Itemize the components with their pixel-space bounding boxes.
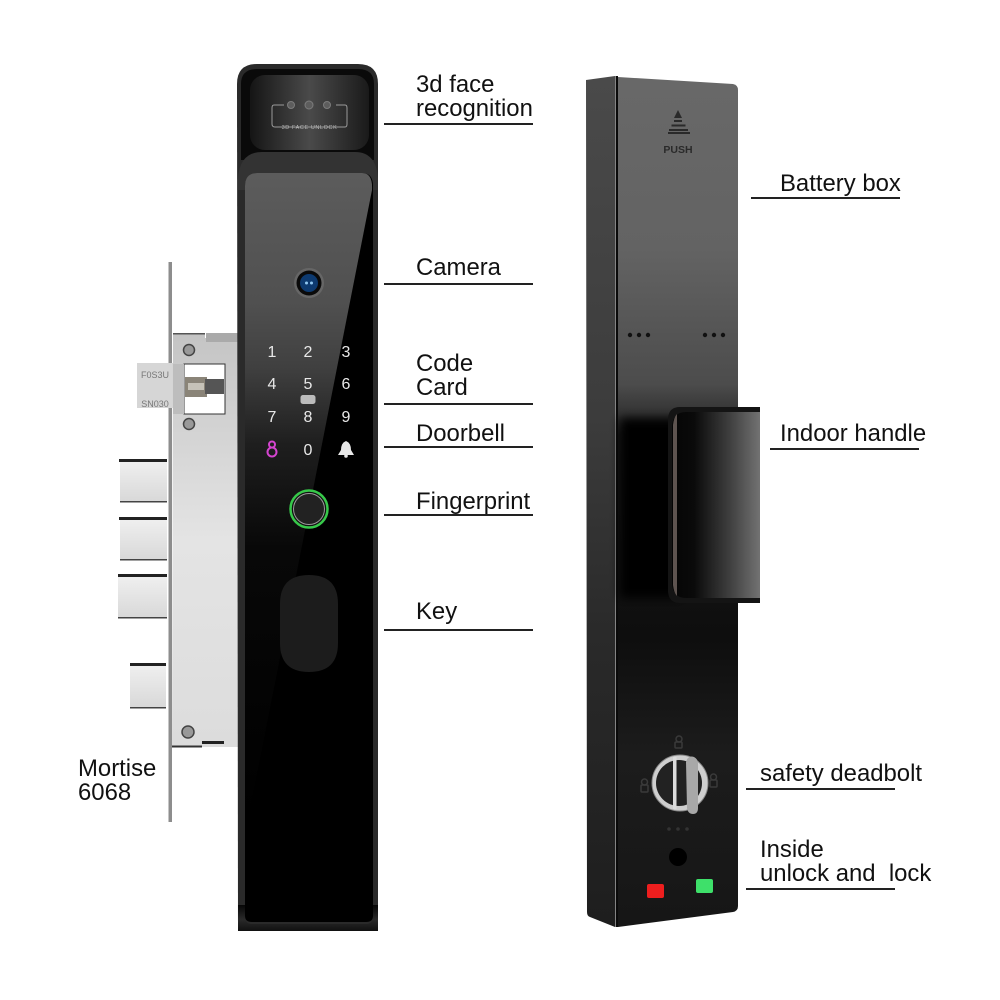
- face recognition window: [250, 75, 369, 150]
- bolt window: [173, 364, 225, 414]
- shoulder band: [238, 152, 378, 190]
- front lock panel: [237, 64, 378, 931]
- window caption: 3D FACE UNLOCK: [282, 125, 337, 131]
- keypad: 2: [304, 344, 313, 361]
- fingerprint sensor: [290, 490, 328, 528]
- push text: PUSH: [663, 144, 693, 156]
- label: key: Key: [416, 598, 457, 625]
- screws: [182, 344, 194, 738]
- label: indoor handle: Indoor handle: [780, 420, 926, 447]
- three dots: [667, 827, 689, 831]
- label: mortise: [78, 755, 156, 806]
- icon: doorbell: [338, 441, 354, 458]
- keypad: 4: [268, 376, 277, 393]
- right dots: [703, 333, 725, 337]
- top dead bolt: [137, 363, 173, 409]
- keypad: 1: [268, 344, 277, 361]
- label: doorbell: Doorbell: [416, 420, 505, 447]
- top dead bolt: SN030: [141, 399, 169, 409]
- handle shadow: [620, 418, 682, 598]
- label: 3d face recognition: recognition: [416, 95, 533, 122]
- glass panel: [245, 173, 373, 922]
- safety deadbolt knob: [641, 736, 717, 814]
- left dots: [628, 333, 650, 337]
- camera: [294, 268, 324, 298]
- keypad: 3: [342, 344, 351, 361]
- key cover: [280, 575, 338, 672]
- indoor handle: [668, 407, 760, 603]
- label: mortise: Mortise: [78, 755, 156, 782]
- label: 3d face recognition: [384, 71, 533, 125]
- keypad: 5: [304, 376, 313, 393]
- label: inside unlock and lock: [746, 836, 931, 890]
- label: code card: [384, 350, 533, 405]
- keypad: [268, 344, 354, 459]
- icon: push arrow: [668, 110, 690, 134]
- label: fingerprint: Fingerprint: [416, 488, 531, 515]
- outer body: [237, 64, 378, 931]
- keypad: 0: [304, 442, 313, 459]
- mortise lock body: [118, 262, 238, 822]
- label: 3d face recognition: 3d face: [416, 71, 494, 98]
- foot: [238, 905, 378, 931]
- keypad: 8: [304, 409, 313, 426]
- icon: card: [300, 395, 316, 404]
- label: inside unlock and lock: Inside: [760, 836, 824, 863]
- main face: [618, 77, 738, 927]
- red button: [647, 884, 664, 898]
- icon: pink lock: [268, 442, 276, 456]
- keypad: 7: [268, 409, 277, 426]
- label: mortise: 6068: [78, 779, 131, 806]
- label: inside unlock and lock: unlock and lock: [760, 860, 931, 887]
- latch two: [119, 517, 167, 560]
- side face: [586, 76, 615, 927]
- back lock panel: [586, 76, 760, 927]
- mortise case: [172, 333, 238, 747]
- latch four: [130, 663, 166, 708]
- label: camera: Camera: [416, 254, 502, 281]
- label: safety deadbolt: safety deadbolt: [760, 760, 922, 787]
- latch one: [119, 459, 167, 502]
- top dead bolt: F0S3U: [141, 370, 169, 380]
- sensor frame: [272, 105, 347, 127]
- latch three: [118, 574, 167, 618]
- green button: [696, 879, 713, 893]
- label: code card: Card: [416, 374, 468, 401]
- sensors: [288, 101, 330, 109]
- key hole: [669, 848, 687, 866]
- mortise faceplate: [168, 262, 172, 822]
- keypad: 9: [342, 409, 351, 426]
- label: code card: Code: [416, 350, 473, 377]
- label: battery box: Battery box: [780, 170, 901, 197]
- top bezel: [241, 69, 374, 160]
- keypad: 6: [342, 376, 351, 393]
- seam: [616, 76, 618, 927]
- lock symbols: [641, 736, 717, 792]
